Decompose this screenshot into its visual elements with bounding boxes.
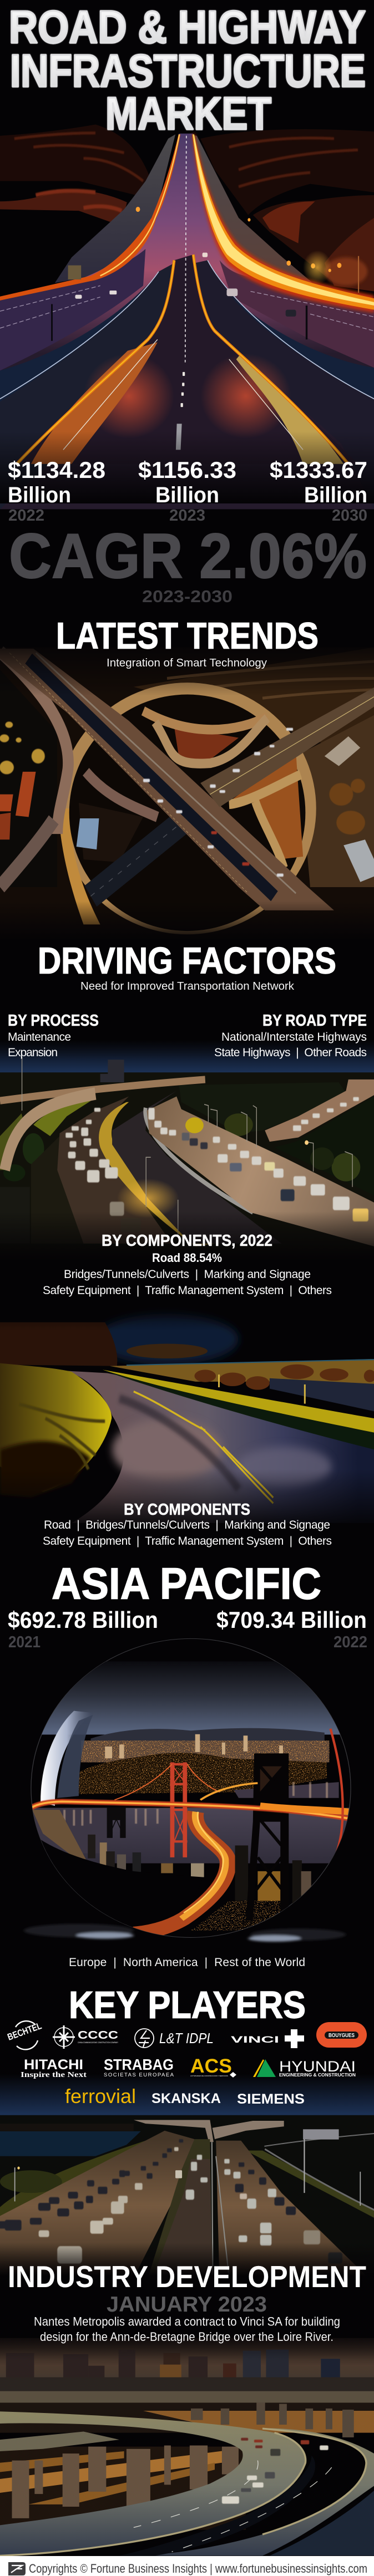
segment: by components 2022: BY COMPONENTS, 2022: [102, 1232, 272, 1250]
market size stat: 2030: 2030: [332, 507, 367, 525]
market size stat: 2023: 2023: [169, 507, 205, 525]
segment: by components 2022: Safety Equipment | Traffic Management System | Others: [43, 1284, 332, 1297]
vehicles on left lanes: [65, 1108, 141, 1232]
main diagonal highway: [0, 649, 334, 910]
ground: [0, 647, 374, 967]
hero fade into black: [0, 431, 374, 503]
asia pacific stat: 2021: $692.78 Billion: [8, 1607, 158, 1633]
sign and posts: [14, 2129, 361, 2206]
segment: by process: BY PROCESS: [8, 1012, 99, 1030]
development description: [34, 2314, 340, 2344]
logo: CCCC: CCCC: [78, 2029, 118, 2042]
driving factors text: Need for Improved Transportation Network: [80, 980, 295, 992]
logo: L&amp;T IDPL: [135, 2029, 214, 2048]
logo: Bouygues: BOUYGUES: [328, 2033, 355, 2039]
trees: [0, 722, 365, 834]
median: [148, 2139, 213, 2278]
left carriageway: [0, 2131, 194, 2278]
panel: elevated curved roads: [0, 2338, 374, 2555]
interchange bottom fade: [0, 901, 374, 941]
market size stat: 2030: [270, 457, 367, 525]
panel: glass sphere with bridge: [24, 1638, 353, 1942]
retaining wall: [145, 1108, 253, 1213]
light trail: left: [0, 134, 180, 301]
panel: rural road scene: [0, 1314, 374, 1523]
development date: JANUARY 2023: [107, 2293, 267, 2317]
dark band behind industry development text: [0, 2243, 374, 2276]
logo: Hyundai E&amp;C: [253, 2058, 356, 2078]
centre road: [153, 2159, 213, 2278]
market size stat: 2030: $1333.67: [270, 457, 367, 483]
lower city lights: [191, 1901, 286, 1931]
buildings right: [235, 1845, 311, 1906]
bottom right road: [270, 2491, 374, 2555]
yellow dome: [185, 1117, 204, 1133]
far road: [265, 1080, 374, 1142]
cars left: [0, 2139, 183, 2264]
delivery truck: [175, 2170, 182, 2178]
logo: Hyundai E&amp;C: HYUNDAI: [279, 2058, 356, 2075]
hills and bushes: [0, 124, 374, 292]
title: [9, 1, 366, 139]
black gap between ramps: [119, 2456, 315, 2555]
outer curved ramp: [129, 2428, 374, 2555]
bridge deck: [31, 1783, 351, 1819]
elevated roads top fade: [0, 2331, 374, 2359]
road shoulders: [55, 134, 312, 283]
buildings: [0, 736, 374, 882]
inner curved ramp: [0, 2411, 306, 2555]
interchange top fade: [0, 638, 374, 696]
central carriageway and glows: [17, 254, 358, 464]
lower pillars: [12, 2446, 239, 2518]
asia pacific stat: 2022: 2022: [333, 1633, 367, 1651]
main lit carriageway: [146, 1097, 374, 1246]
heading: key players: KEY PLAYERS: [69, 1984, 306, 2026]
centre line: [134, 1392, 273, 1503]
market size stat: 2023: Billion: [155, 483, 219, 507]
segment: by road type: [214, 1012, 367, 1059]
cars: [75, 253, 296, 317]
horizon line: [127, 1360, 374, 1365]
highrise buildings left: [32, 1810, 204, 1877]
street lights: [136, 207, 341, 284]
panel: interchange scene: [0, 647, 374, 967]
logo: CCCC: CHINA COMMUNICATIONS CONSTRUCTION COMPANY: [78, 2041, 118, 2044]
skyline: [0, 2350, 374, 2391]
night highway top fade: [0, 1026, 374, 1060]
cars right: [186, 2155, 342, 2264]
tower cross bracing: [255, 1766, 284, 1891]
market size stat: 2023: [138, 457, 236, 525]
black mound: [41, 1840, 203, 1933]
market size stat: 2022: Billion: [8, 483, 71, 507]
logo: L&amp;T IDPL: L&T IDPL: [159, 2030, 214, 2046]
sphere base: [31, 1638, 351, 1937]
segment: by road type: State Highways | Other Roads: [214, 1046, 367, 1059]
upper overpass: [0, 2391, 374, 2410]
segment: by road type: National/Interstate Highways: [221, 1031, 367, 1043]
market size stat: 2023: $1156.33: [138, 457, 236, 483]
logo: Hitachi: [21, 2057, 87, 2079]
right carriageway: [216, 2141, 374, 2283]
lamp glow: [305, 1141, 309, 1145]
red bridge tower: [170, 1762, 188, 1857]
parapet highlights: [0, 2429, 366, 2555]
panel: night highway scene: [0, 1040, 374, 1270]
water reflections: [64, 1782, 327, 1826]
logo: CCCC: [53, 2025, 118, 2049]
logo: Hitachi: HITACHI: [24, 2057, 83, 2073]
logo: Bechtel: BECHTEL: [6, 2020, 43, 2043]
dusk sky: [0, 2338, 374, 2396]
lit median: [99, 1102, 215, 1246]
right red cable: [329, 1729, 343, 1869]
logo: Vinci: VINCI: [231, 2034, 279, 2045]
market size stat: 2022: [8, 457, 105, 525]
ring ramp: [58, 683, 316, 934]
segment: by components: BY COMPONENTS: [124, 1501, 250, 1519]
title: MARKET: [105, 88, 271, 139]
ground reflections: [24, 1924, 346, 1942]
logo: Vinci: [231, 2029, 304, 2048]
asia pacific stat: 2021: 2021: [8, 1633, 41, 1651]
segment: by process: Expansion: [8, 1046, 58, 1059]
mask below interchange: [0, 941, 374, 1046]
light trail: right: [193, 134, 374, 313]
lower ground with traffic: [0, 2447, 246, 2530]
cross highway: [200, 688, 374, 807]
ground: [0, 1060, 374, 1270]
sphere contents: [29, 1661, 353, 1933]
segment: by components: [43, 1501, 332, 1547]
logo: Skanska: SKANSKA: [151, 2091, 221, 2106]
asia pacific stat: 2021: [8, 1607, 158, 1651]
market size stat: 2022: 2022: [8, 507, 44, 525]
road highlights: [112, 1398, 332, 1489]
logo: ACS: ACS: [190, 2055, 232, 2077]
panel: footer: [0, 2556, 374, 2576]
development description: design for the Ann-de-Bretagne Bridge over the Loire River.: [40, 2330, 333, 2344]
fence posts: [218, 1374, 306, 1404]
main road: [67, 1371, 374, 1523]
glass highlight: [41, 1711, 93, 1806]
left deck: [0, 2432, 119, 2451]
heading: driving factors: DRIVING FACTORS: [38, 940, 336, 981]
land: [0, 2115, 374, 2274]
orange lit lanes: [143, 2411, 374, 2433]
rural bottom fade: [0, 1469, 374, 1530]
night highway bottom fade: [0, 1211, 374, 1261]
market size stat: 2022: $1134.28: [8, 457, 105, 483]
far field: [110, 1359, 374, 1387]
logo: Siemens: SIEMENS: [237, 2091, 305, 2107]
segment: by components: Safety Equipment | Traffic Management System | Others: [43, 1535, 332, 1547]
grass shadows: [0, 1404, 105, 1498]
logo: Bechtel: [6, 2020, 43, 2049]
segment: by components 2022: Bridges/Tunnels/Culverts | Marking and Signage: [64, 1268, 311, 1281]
black bridge tower: [246, 1753, 289, 1921]
road marks and posts: [51, 256, 359, 450]
main purple road: [0, 134, 374, 509]
logo: Hitachi: Inspire the Next: [21, 2071, 87, 2079]
mask below night highway: [0, 1261, 374, 1309]
cross road lanes: [0, 249, 374, 370]
small dark tower: [108, 1808, 125, 1837]
verge: [103, 1370, 374, 1449]
development description: Nantes Metropolis awarded a contract to Vinci SA for building: [34, 2314, 340, 2329]
left carriageway: [57, 1097, 172, 1244]
right lit pier: [289, 1834, 346, 1911]
under deck: [0, 2402, 374, 2433]
left grass bank: [0, 1363, 112, 1492]
asia pacific stat: 2022: [216, 1607, 367, 1651]
centre barrier: [212, 2142, 229, 2278]
logo: Hyundai E&amp;C: ENGINEERING & CONSTRUCTION: [279, 2073, 356, 2078]
asia pacific stat: 2022: $709.34 Billion: [216, 1607, 367, 1633]
logo: Bouygues: [316, 2022, 367, 2048]
sky and trees: [0, 1314, 239, 1366]
segment: by components: Road | Bridges/Tunnels/Culverts | Marking and Signage: [44, 1519, 330, 1531]
inner ramps: [0, 651, 301, 896]
inner fields: [79, 726, 303, 862]
logo: Strabag: STRABAG: [104, 2056, 174, 2073]
regions list: Europe | North America | Rest of the World: [69, 1956, 305, 1969]
lit block: [257, 1871, 281, 1901]
bushes: [194, 1365, 374, 1390]
heading: asia pacific: ASIA PACIFIC: [52, 1559, 321, 1608]
side road: [270, 1378, 374, 1411]
lane dashes: [134, 2461, 332, 2552]
segment: by process: Maintenance: [8, 1031, 71, 1043]
cables: [114, 1764, 220, 1800]
segment: by process: [8, 1012, 99, 1059]
logo: ACS: ACTIVIDADES DE CONSTRUCCION Y SERVICIOS: [190, 2075, 228, 2077]
ramps and elevated road: [0, 1080, 205, 1170]
sky: [0, 1040, 374, 1074]
upper pillars: [191, 2402, 354, 2437]
centre carriageway: [112, 1091, 281, 1244]
band base: [0, 2276, 374, 2351]
far interchange: [134, 2120, 284, 2142]
market size stat: 2030: Billion: [304, 483, 367, 507]
panel: highway with traffic: [0, 2074, 374, 2283]
footer background: [0, 2556, 374, 2576]
ramp vehicles: [222, 2438, 328, 2504]
CAGR period: 2023-2030: [142, 587, 233, 606]
logo: Strabag: SOCIETAS EUROPAEA: [104, 2072, 174, 2078]
heading: latest trends: LATEST TRENDS: [56, 615, 319, 656]
dusk sky: [0, 2074, 374, 2116]
curving road: [134, 1812, 228, 1933]
logo: Ferrovial: ferrovial: [65, 2085, 136, 2107]
icon: fortune business insights logo: [8, 2562, 26, 2575]
segment: by components 2022: Road 88.54%: [152, 1251, 222, 1265]
rural top fade: [0, 1297, 374, 1331]
vehicles on right lanes: [148, 1097, 368, 1221]
lamp posts: [22, 1057, 352, 1238]
centre dashes: [185, 136, 186, 365]
latest trends text: Integration of Smart Technology: [107, 656, 267, 669]
segment: by components 2022: [43, 1232, 332, 1297]
vehicles: [143, 728, 293, 877]
lower lanes: [0, 260, 374, 509]
panel: hero road scene: [0, 124, 374, 509]
warm glow: [117, 1179, 179, 1218]
